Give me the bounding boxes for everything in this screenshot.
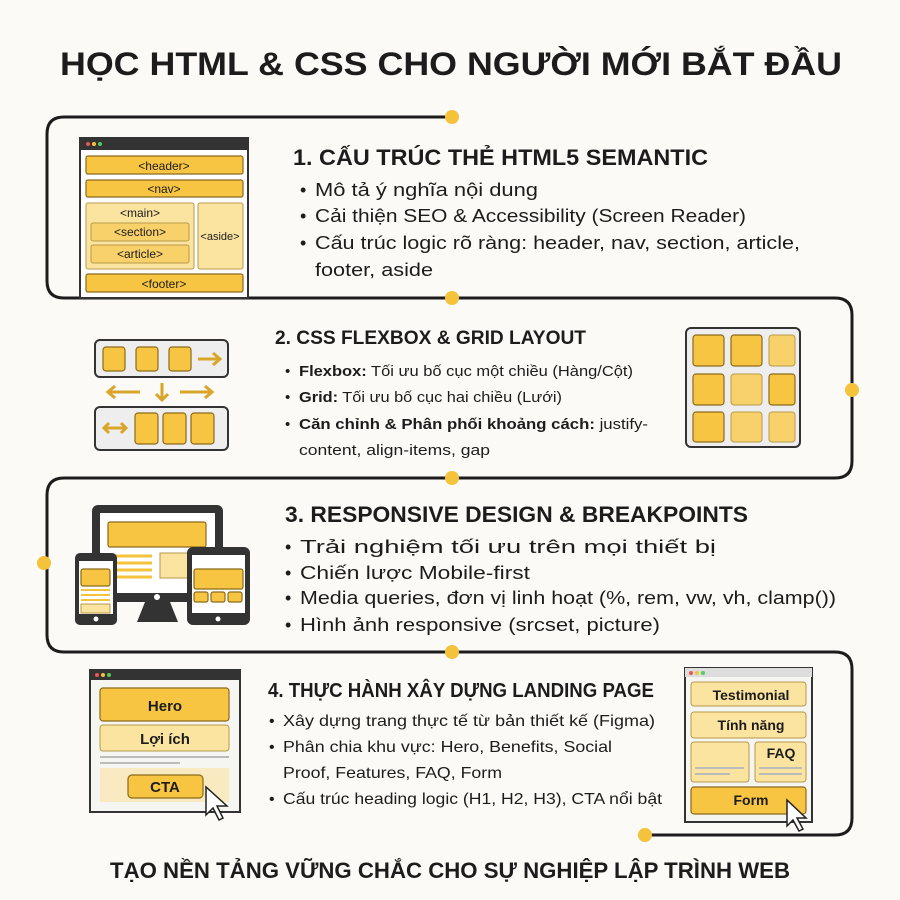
bullets 4: Xây dựng trang thực tế từ bản thiết kế (Figma) <box>283 713 655 730</box>
bullets 2: • <box>285 389 290 406</box>
icon: landing page browser: CTA <box>150 779 180 796</box>
icon: semantic browser <box>80 138 248 298</box>
icon: landing page browser <box>90 670 240 820</box>
footer tagline: TẠO NỀN TẢNG VỮNG CHẮC CHO SỰ NGHIỆP LẬP TRÌNH WEB <box>110 858 790 883</box>
panel: section 1 <box>80 138 800 298</box>
bullets 1: • <box>300 206 306 226</box>
icon: grid <box>686 328 800 447</box>
bullets 3: • <box>285 537 291 557</box>
icon: landing page browser: Hero <box>148 698 182 715</box>
bullets 4: • <box>269 713 275 730</box>
bullets 4: Cấu trúc heading logic (H1, H2, H3), CTA nổi bật <box>283 790 663 808</box>
icon: form browser: Testimonial <box>713 687 789 703</box>
connector path <box>37 110 859 842</box>
icon: semantic browser: <main> <box>120 206 160 220</box>
heading 3: 3. RESPONSIVE DESIGN & BREAKPOINTS <box>285 502 748 527</box>
bullets 1: footer, aside <box>315 260 433 280</box>
bullets 1 <box>300 180 800 280</box>
icon: semantic browser: <nav> <box>147 182 181 196</box>
bullets 2: Căn chỉnh & Phân phối khoảng cách: justify- <box>299 416 648 433</box>
bullets 3: Hình ảnh responsive (srcset, picture) <box>300 615 660 635</box>
bullets 3: Chiến lược Mobile-first <box>300 563 530 583</box>
bullets 4: • <box>269 739 275 756</box>
icon: semantic browser: <footer> <box>142 277 186 291</box>
bullets 3: Trải nghiệm tối ưu trên mọi thiết bị <box>300 537 716 557</box>
heading 4: 4. THỰC HÀNH XÂY DỰNG LANDING PAGE <box>268 678 654 702</box>
bullets 1: • <box>300 180 306 200</box>
icon: semantic browser: <section> <box>114 225 166 239</box>
icon: devices <box>75 505 250 625</box>
bullets 4 <box>269 713 663 808</box>
panel: section 4 <box>90 668 812 831</box>
bullets 3: • <box>285 615 291 635</box>
bullets 3: Media queries, đơn vị linh hoạt (%, rem, vw, vh, clamp()) <box>300 588 836 608</box>
bullets 2: Grid: Tối ưu bố cục hai chiều (Lưới) <box>299 389 562 406</box>
bullets 2: Flexbox: Tối ưu bố cục một chiều (Hàng/Cột) <box>299 363 633 380</box>
bullets 2: • <box>285 363 290 380</box>
bullets 3: • <box>285 588 291 608</box>
bullets 4: • <box>269 791 275 808</box>
icon: semantic browser: <article> <box>117 247 163 261</box>
icon: flexbox <box>95 340 228 450</box>
icon: semantic browser: <aside> <box>200 231 240 243</box>
bullets 2 <box>285 363 648 459</box>
icon: semantic browser: <header> <box>138 159 190 173</box>
bullets 1: Mô tả ý nghĩa nội dung <box>315 180 538 200</box>
bullets 2: • <box>285 416 290 433</box>
icon: form browser <box>685 668 812 831</box>
icon: form browser: Tính năng <box>718 717 784 733</box>
bullets 3 <box>285 537 836 635</box>
bullets 3: • <box>285 563 291 583</box>
heading 1: 1. CẤU TRÚC THẺ HTML5 SEMANTIC <box>293 145 708 170</box>
bullets 1: • <box>300 233 306 253</box>
panel: section 2 <box>95 328 800 459</box>
bullets 4: Proof, Features, FAQ, Form <box>283 765 502 782</box>
icon: form browser: FAQ <box>767 745 795 761</box>
icon: form browser: Form <box>734 792 768 808</box>
title: HỌC HTML & CSS CHO NGƯỜI MỚI BẮT ĐẦU <box>60 46 842 82</box>
bullets 1: Cải thiện SEO & Accessibility (Screen Reader) <box>315 206 746 226</box>
panel: section 3 <box>75 502 836 635</box>
bullets 1: Cấu trúc logic rõ ràng: header, nav, section, article, <box>315 233 800 253</box>
icon: landing page browser: Lợi ích <box>140 731 190 748</box>
bullets 4: Phân chia khu vực: Hero, Benefits, Social <box>283 739 612 756</box>
heading 2: 2. CSS FLEXBOX & GRID LAYOUT <box>275 328 586 349</box>
bullets 2: content, align-items, gap <box>299 442 490 459</box>
